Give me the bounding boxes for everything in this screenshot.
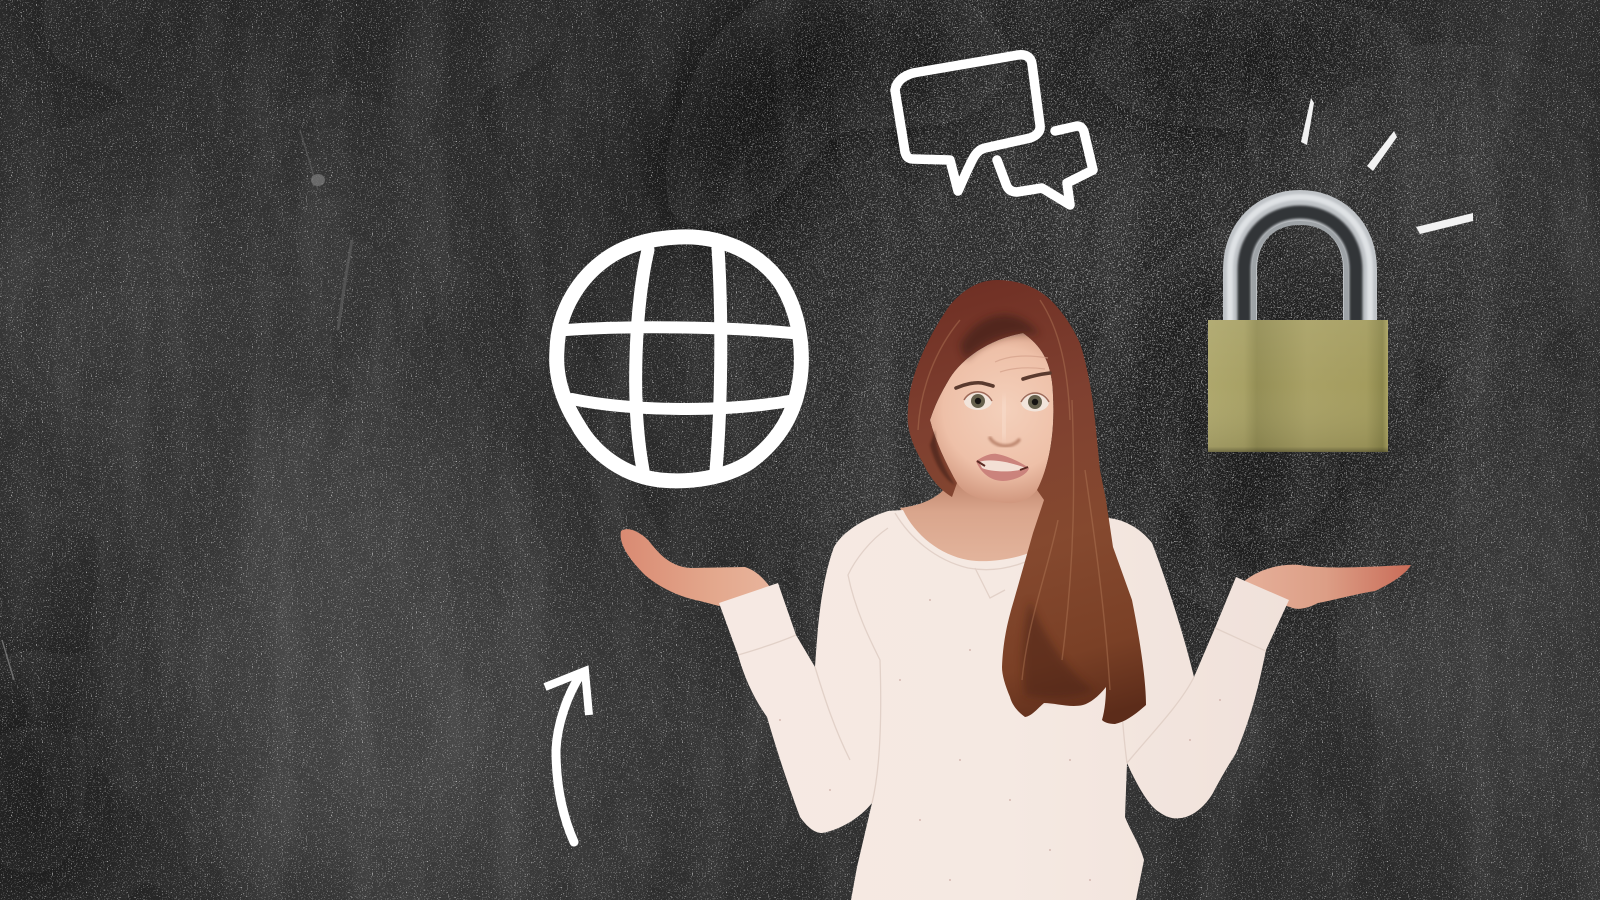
padlock shackle — [1230, 197, 1370, 322]
icon: padlock — [1208, 197, 1388, 452]
icon: chalk arrow — [545, 671, 589, 842]
eyebrows — [956, 373, 1050, 388]
neck — [900, 470, 1050, 562]
padlock body — [1208, 320, 1388, 452]
woman shrugging — [621, 280, 1411, 900]
chalk scuffs — [2, 130, 352, 680]
hair shadows — [930, 315, 1095, 698]
hair — [908, 280, 1146, 724]
large bubble — [895, 55, 1040, 191]
sweater — [719, 510, 1289, 900]
face — [930, 333, 1053, 503]
mouth — [976, 454, 1029, 481]
forehead wrinkles — [995, 356, 1048, 372]
hand left — [621, 529, 772, 606]
icon: chalk globe — [557, 237, 801, 481]
icon: chalk spark marks — [1301, 98, 1473, 234]
small bubble — [997, 126, 1093, 205]
sweater seams — [738, 513, 1266, 803]
nose — [990, 400, 1019, 446]
eyes — [964, 392, 1049, 412]
hair strands — [918, 300, 1110, 690]
icon: chat bubbles — [895, 55, 1093, 205]
hand right — [1240, 565, 1411, 609]
sweater speckles — [779, 599, 1221, 881]
